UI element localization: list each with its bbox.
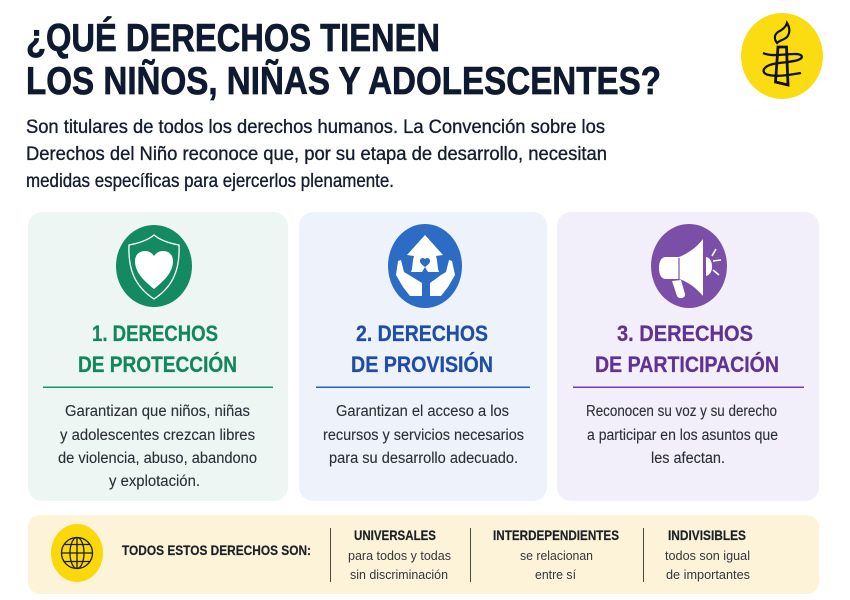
heading: participación: 3. DERECHOS bbox=[617, 321, 753, 346]
item: interdependientes: INTERDEPENDIENTES bbox=[493, 527, 619, 543]
panel: derechos de participación bbox=[557, 212, 819, 501]
intro text: Son titulares de todos los derechos humanos. La Convención sobre los bbox=[26, 116, 605, 138]
label: todos estos derechos son: TODOS ESTOS DERECHOS SON: bbox=[122, 542, 311, 558]
heading: provisión: DE PROVISIÓN bbox=[351, 352, 493, 377]
text: protección bbox=[58, 403, 257, 490]
text: provisión: para su desarrollo adecuado. bbox=[329, 450, 518, 467]
text: protección: de violencia, abuso, abandono bbox=[58, 450, 257, 467]
title: ¿QUÉ DERECHOS TIENEN bbox=[26, 16, 440, 60]
icon: Amnesty candle logo bbox=[741, 13, 823, 99]
text: protección: Garantizan que niños, niñas bbox=[65, 403, 250, 420]
text: provisión: Garantizan el acceso a los bbox=[336, 403, 509, 420]
item: indivisibles: INDIVISIBLES bbox=[668, 527, 746, 543]
panel: derechos de provisión bbox=[299, 212, 547, 501]
item: universales: para todos y todas bbox=[348, 548, 451, 563]
panel: derechos de protección bbox=[28, 212, 288, 501]
heading: participación: DE PARTICIPACIÓN bbox=[595, 352, 779, 377]
icon: megaphone bbox=[651, 224, 727, 308]
text: protección: y adolescentes crezcan libres bbox=[60, 427, 255, 444]
text: provisión: recursos y servicios necesarios bbox=[323, 427, 524, 444]
text: provisión bbox=[323, 403, 524, 467]
heading: participación bbox=[595, 321, 779, 377]
item: universales bbox=[348, 527, 451, 582]
title: LOS NIÑOS, NIÑAS Y ADOLESCENTES? bbox=[26, 59, 661, 103]
item: universales: sin discriminación bbox=[350, 567, 448, 582]
text: participación: les afectan. bbox=[651, 450, 725, 467]
intro text: medidas específicas para ejercerlos plenamente. bbox=[26, 170, 394, 192]
text: protección: y explotación. bbox=[109, 473, 200, 490]
text: participación: Reconocen su voz y su derecho bbox=[586, 403, 777, 420]
item: interdependientes bbox=[493, 527, 619, 582]
icon: shield with heart bbox=[116, 225, 192, 307]
item: indivisibles: de importantes bbox=[666, 567, 750, 582]
item: interdependientes: entre sí bbox=[535, 567, 576, 582]
panel: bottom band bbox=[28, 515, 819, 594]
title bbox=[26, 16, 661, 103]
heading: provisión: 2. DERECHOS bbox=[356, 321, 488, 346]
text: participación bbox=[586, 403, 778, 467]
heading: protección: 1. DERECHOS bbox=[92, 321, 218, 346]
icon: house and hands bbox=[388, 224, 462, 308]
item: indivisibles: todos son igual bbox=[665, 548, 750, 563]
text: participación: a participar en los asuntos que bbox=[587, 427, 778, 444]
item: interdependientes: se relacionan bbox=[520, 548, 593, 563]
intro text: Derechos del Niño reconoce que, por su etapa de desarrollo, necesitan bbox=[26, 143, 607, 165]
icon: globe bbox=[51, 524, 103, 582]
item: universales: UNIVERSALES bbox=[354, 527, 436, 543]
heading: provisión bbox=[351, 321, 493, 377]
heading: protección bbox=[78, 321, 237, 377]
item: indivisibles bbox=[665, 527, 750, 582]
intro text bbox=[26, 116, 607, 192]
heading: protección: DE PROTECCIÓN bbox=[78, 352, 237, 377]
